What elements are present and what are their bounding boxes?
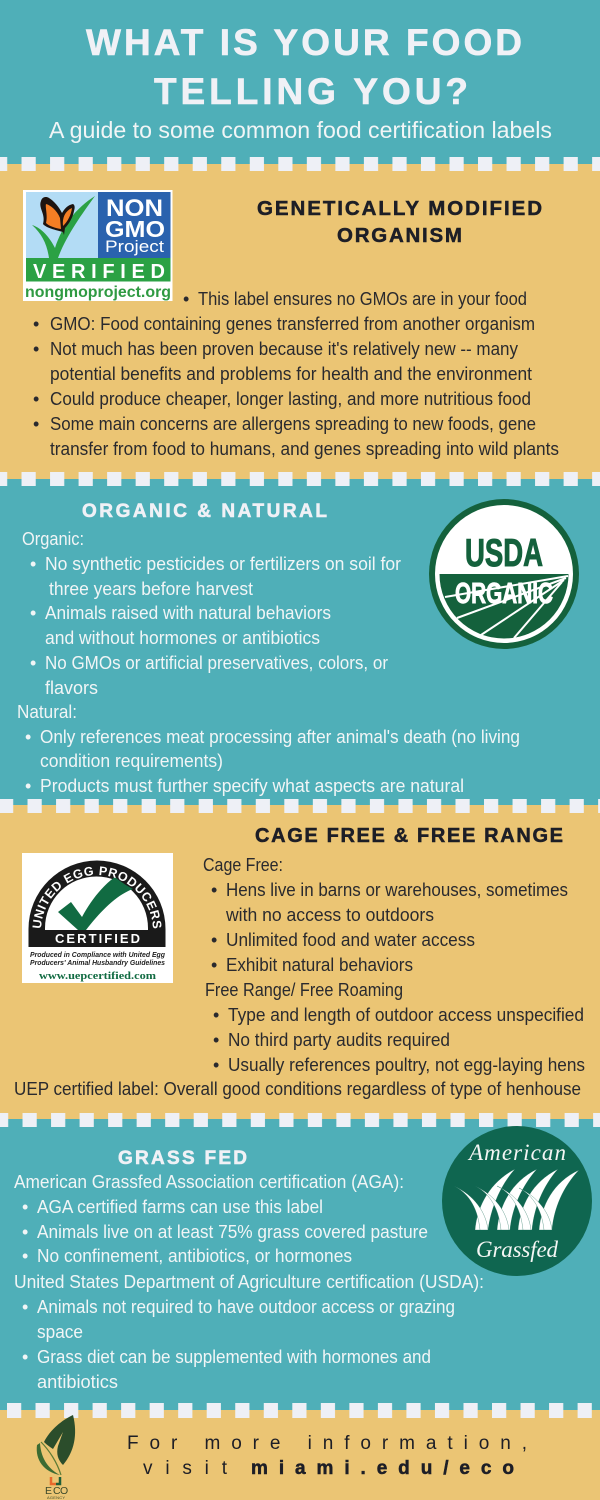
bullet list: free range: • [213,1005,219,1025]
bullet list: AGA: • [22,1197,28,1217]
bullet list: natural: • [25,776,31,796]
bullet list: USDA: space [37,1322,83,1342]
icon: United Egg Producers certified label: www.uepcertified.com [39,970,156,982]
bullet list: • [33,414,39,434]
icon: American Grassfed seal: Grassfed [476,1237,558,1262]
bullet list: • [183,289,189,309]
bullet list: natural [17,702,520,796]
bullet list: • [33,314,39,334]
bullet list: organic: and without hormones or antibiotics [45,628,320,648]
heading: GENETICALLY MODIFIED [257,197,542,220]
bullet list: free range [205,980,585,1075]
bullet list: USDA: Animals not required to have outdoor access or grazing [37,1297,455,1317]
bullet list: This label ensures no GMOs are in your food [198,289,527,309]
bullet list: natural: Natural: [17,702,77,722]
bullet list: natural: • [25,727,31,747]
panel: cage free and free range [14,825,585,1099]
icon: Non GMO Project verified label: Project [105,237,164,256]
bullet list: potential benefits and problems for health and the environment [50,364,532,384]
heading: CAGE FREE & FREE RANGE [255,825,563,847]
icon: United Egg Producers certified label: Producers' Animal Husbandry Guidelines [30,960,165,967]
bullet list: AGA: • [22,1222,28,1242]
icon: American Grassfed seal [442,1126,592,1276]
icon: Eco Agency leaf logo [37,1415,75,1500]
bullet list: AGA [14,1172,428,1266]
title [86,22,522,112]
bullet list: Not much has been proven because it's relatively new -- many [50,339,518,359]
bullet list: • [33,389,39,409]
footer call to action [127,1433,527,1479]
bullet list: AGA: Animals live on at least 75% grass covered pasture [37,1222,428,1242]
bullet list: free range: • [213,1030,219,1050]
bullet list: natural: Only references meat processing after animal's death (no living [40,727,520,747]
heading: ORGANISM [337,224,462,247]
bullet list: Could produce cheaper, longer lasting, and more nutritious food [50,389,531,409]
bullet list: USDA: • [22,1347,28,1367]
panel: organic and natural [17,499,579,796]
icon: Non GMO Project verified label: GMO [105,216,165,242]
bullet list: natural: Products must further specify what aspects are natural [40,776,464,796]
bullet list: free range: Usually references poultry, not egg-laying hens [228,1055,585,1075]
UEP note: UEP certified label: Overall good conditions regardless of type of henhouse [14,1079,581,1099]
subtitle: A guide to some common food certification labels [49,117,552,143]
bullet list: USDA [14,1272,484,1392]
bullet list: Some main concerns are allergens spreading to new foods, gene [50,414,536,434]
icon: Non GMO Project verified label: NON [106,195,163,222]
bullet list: USDA: • [22,1297,28,1317]
icon: Non GMO Project verified label: nongmoproject.org [25,284,171,301]
icon: USDA organic seal [429,499,579,649]
icon: United Egg Producers certified label: UNITED EGG PRODUCERS [32,866,162,928]
title: TELLING YOU? [154,71,468,112]
bullet list: cage free [203,855,568,975]
bullet list: organic [22,529,401,698]
icon: USDA organic seal: ORGANIC [455,578,553,610]
bullet list: organic: No synthetic pesticides or fertilizers on soil for [45,554,401,574]
bullet list: transfer from food to humans, and genes spreading into wild plants [50,439,559,459]
bullet list: cage free: • [211,955,217,975]
bullet list: cage free: with no access to outdoors [225,905,434,925]
bullet list: organic: Animals raised with natural behaviors [45,603,331,623]
panel: grass fed [14,1126,592,1392]
panel: footer [37,1415,527,1500]
icon: Eco Agency leaf logo: ECO [45,1485,68,1497]
bullet list: cage free: Cage Free: [203,855,283,875]
bullet list: cage free: Hens live in barns or warehouses, sometimes [226,880,568,900]
footer call to action: For more information, [127,1433,527,1454]
bullet list: organic: • [30,554,36,574]
bullet list: organic: • [30,603,36,623]
bullet list: cage free: Exhibit natural behaviors [226,955,413,975]
bullet list: organic: Organic: [22,529,84,549]
bullet list [33,289,559,459]
icon: United Egg Producers certified label [22,853,173,983]
bullet list: organic: flavors [45,678,98,698]
title: WHAT IS YOUR FOOD [86,22,522,63]
bullet list: AGA: • [22,1246,28,1266]
heading: GRASS FED [118,1148,247,1169]
bullet list: AGA: American Grassfed Association certification (AGA): [14,1172,404,1192]
bullet list: USDA: Grass diet can be supplemented with hormones and [37,1347,431,1367]
bullet list: AGA: No confinement, antibiotics, or hormones [37,1246,352,1266]
footer call to action: visit [143,1458,228,1479]
bullet list: organic: three years before harvest [49,579,253,599]
icon: Non GMO Project verified label: VERIFIED [33,261,165,283]
bullet list: free range: No third party audits required [228,1030,450,1050]
bullet list: cage free: • [211,930,217,950]
bullet list: • [33,339,39,359]
bullet list: cage free: • [211,880,217,900]
icon: USDA organic seal: USDA [465,532,543,575]
bullet list: cage free: Unlimited food and water access [226,930,475,950]
icon: Eco Agency leaf logo: AGENCY [47,1495,65,1500]
bullet list: USDA: antibiotics [37,1372,118,1392]
bullet list: free range: Free Range/ Free Roaming [205,980,403,1000]
bullet list: organic: • [30,653,36,673]
panel: genetically modified organism [23,190,559,459]
bullet list: natural: condition requirements) [40,751,223,771]
bullet list: AGA: AGA certified farms can use this label [37,1197,323,1217]
footer call to action: miami.edu/eco [251,1458,514,1479]
icon: American Grassfed seal: American [467,1140,566,1165]
bullet list: organic: No GMOs or artificial preservatives, colors, or [45,653,388,673]
icon: United Egg Producers certified label: Produced in Compliance with United Egg [30,952,166,959]
bullet list: free range: Type and length of outdoor access unspecified [228,1005,584,1025]
heading [257,197,542,247]
icon: Non GMO Project verified label [23,190,172,301]
heading: ORGANIC & NATURAL [82,501,327,522]
bullet list: USDA: United States Department of Agriculture certification (USDA): [14,1272,484,1292]
icon: United Egg Producers certified label: CERTIFIED [55,931,140,946]
bullet list: free range: • [213,1055,219,1075]
bullet list: GMO: Food containing genes transferred from another organism [50,314,535,334]
